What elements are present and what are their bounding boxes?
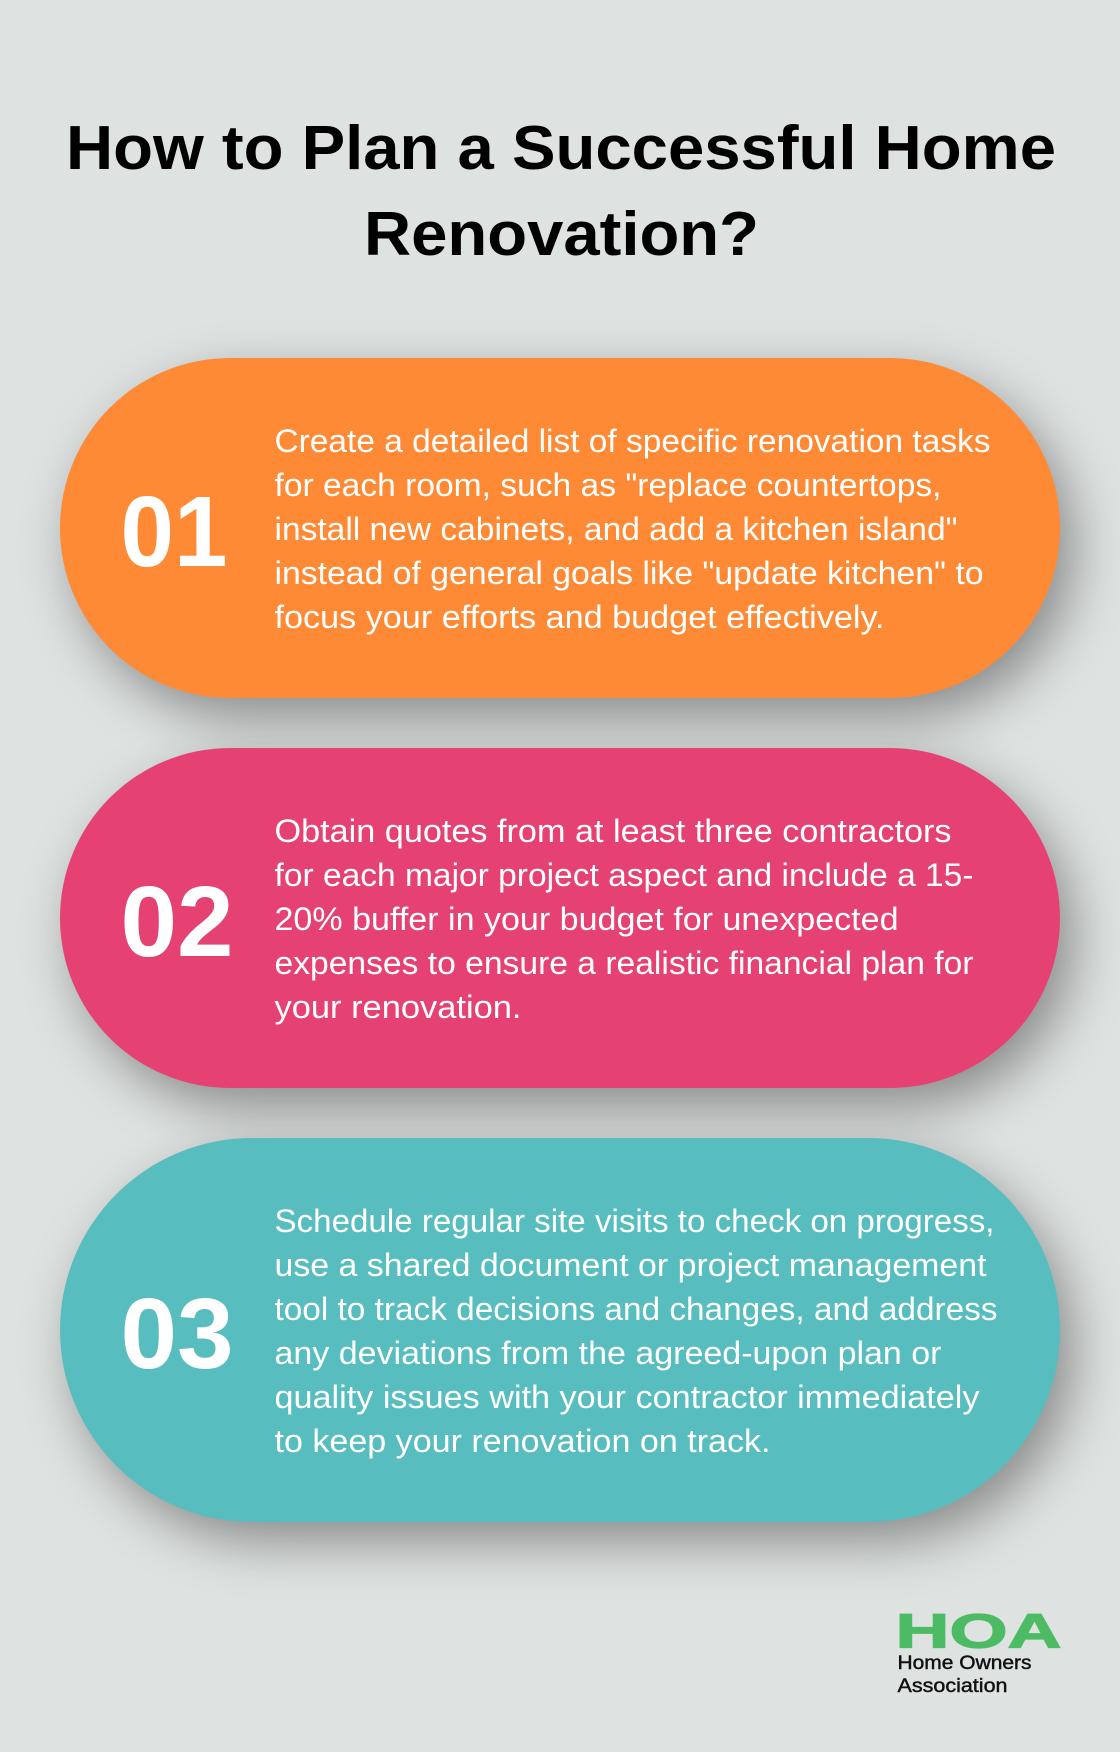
title (66, 114, 1056, 269)
text block: step 03: quality issues with your contractor immediately (274, 1379, 980, 1415)
text block: step 01: for each room, such as "replace countertops, (274, 467, 941, 503)
text block: step 03 (274, 1203, 998, 1459)
text block: step 01: focus your efforts and budget effectively. (274, 599, 884, 635)
logo: Home Owners Association (896, 1606, 1062, 1697)
number 01: 01 (120, 476, 228, 588)
text block: step 03: use a shared document or project management (274, 1247, 987, 1283)
text block: step 01: install new cabinets, and add a kitchen island" (274, 511, 958, 547)
title: How to Plan a Successful Home (66, 114, 1056, 183)
text block: step 02 (274, 813, 974, 1025)
title: Renovation? (364, 200, 759, 269)
text block: step 03: tool to track decisions and changes, and address (274, 1291, 998, 1327)
panel: step 02 pink pill (60, 748, 1060, 1088)
text block: step 03: to keep your renovation on track. (274, 1423, 770, 1459)
panel: step 03 teal pill (60, 1138, 1060, 1522)
logo: Home Owners Association: HOA (896, 1606, 1062, 1658)
text block: step 02: for each major project aspect and include a 15- (274, 857, 974, 893)
text block: step 02: Obtain quotes from at least three contractors (274, 813, 952, 849)
text block: step 02: 20% buffer in your budget for unexpected (274, 901, 898, 937)
logo: Home Owners Association: Home Owners (898, 1653, 1032, 1674)
text block: step 02: expenses to ensure a realistic financial plan for (274, 945, 974, 981)
text block: step 02: your renovation. (274, 989, 522, 1025)
number 02: 02 (120, 866, 234, 978)
text block: step 01: instead of general goals like "update kitchen" to (274, 555, 983, 591)
logo: Home Owners Association: Association (898, 1676, 1008, 1697)
number 03: 03 (120, 1278, 234, 1390)
text block: step 01: Create a detailed list of specific renovation tasks (274, 423, 990, 459)
panel: step 01 orange pill (60, 358, 1060, 698)
text block: step 01 (274, 423, 990, 635)
text block: step 03: Schedule regular site visits to check on progress, (274, 1203, 994, 1239)
text block: step 03: any deviations from the agreed-upon plan or (274, 1335, 942, 1371)
